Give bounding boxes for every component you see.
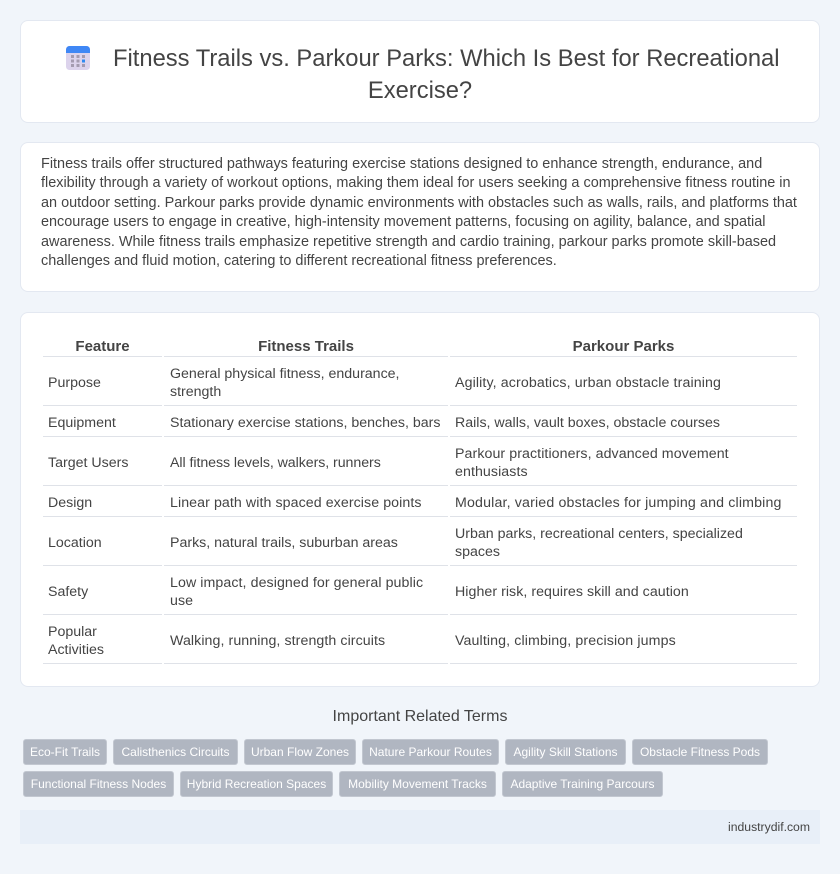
comparison table: spaces <box>455 544 500 560</box>
table headers: Parkour Parks <box>573 338 674 355</box>
related term tags: Hybrid Recreation Spaces <box>187 777 326 791</box>
icon: calendar <box>66 46 90 70</box>
related term tags: Calisthenics Circuits <box>121 745 230 759</box>
comparison table: Modular, varied obstacles for jumping and climbing <box>455 495 782 511</box>
comparison table: Target Users <box>48 455 128 471</box>
comparison table: Low impact, designed for general public <box>170 575 423 591</box>
related term tags: Obstacle Fitness Pods <box>640 745 760 759</box>
related term tags: Adaptive Training Parcours <box>510 777 655 791</box>
comparison table: Rails, walls, vault boxes, obstacle courses <box>455 415 720 431</box>
comparison table: Vaulting, climbing, precision jumps <box>455 633 676 649</box>
related term tags: Nature Parkour Routes <box>369 745 492 759</box>
title: Exercise? <box>368 77 472 104</box>
comparison table: Design <box>48 495 92 511</box>
related terms heading: Important Related Terms <box>333 708 507 725</box>
comparison table <box>43 338 797 664</box>
related term tags <box>23 739 768 797</box>
comparison table: All fitness levels, walkers, runners <box>170 455 381 471</box>
comparison table: Activities <box>48 642 104 658</box>
related term tags: Urban Flow Zones <box>251 745 349 759</box>
comparison table: Popular <box>48 624 97 640</box>
comparison table: strength <box>170 384 221 400</box>
related term tags: Functional Fitness Nodes <box>31 777 166 791</box>
comparison table: enthusiasts <box>455 464 528 480</box>
intro text: an outdoor setting. Parkour parks provide dynamic environments with obstacles such as walls, rails, and platforms that <box>41 194 797 210</box>
comparison table: Equipment <box>48 415 116 431</box>
intro text: challenges and fluid motion, catering to different recreational fitness preferences. <box>41 253 557 269</box>
comparison table: Safety <box>48 584 88 600</box>
comparison table: General physical fitness, endurance, <box>170 366 400 382</box>
panel: intro paragraph <box>20 142 820 292</box>
comparison table: Higher risk, requires skill and caution <box>455 584 689 600</box>
title <box>113 45 780 104</box>
header panel <box>20 20 820 123</box>
comparison table: Walking, running, strength circuits <box>170 633 385 649</box>
footer source: industrydif.com <box>728 820 810 834</box>
table headers: Feature <box>75 338 130 355</box>
intro text: encourage users to engage in creative, high-intensity movement patterns, focusing on agility, balance, and spatial <box>41 214 765 230</box>
intro text <box>41 156 797 269</box>
comparison table: use <box>170 593 193 609</box>
related term tags: Mobility Movement Tracks <box>348 777 487 791</box>
related term tags: Eco-Fit Trails <box>30 745 100 759</box>
comparison table: Stationary exercise stations, benches, bars <box>170 415 440 431</box>
intro text: awareness. While fitness trails emphasize repetitive strength and cardio training, parkour parks promote skill-based <box>41 234 776 250</box>
comparison table: Urban parks, recreational centers, specialized <box>455 526 743 542</box>
comparison table: Agility, acrobatics, urban obstacle training <box>455 375 721 391</box>
comparison table: Location <box>48 535 102 551</box>
table headers: Fitness Trails <box>258 338 354 355</box>
comparison table: Purpose <box>48 375 101 391</box>
title: Fitness Trails vs. Parkour Parks: Which Is Best for Recreational <box>113 45 780 72</box>
table headers <box>75 338 674 355</box>
intro text: Fitness trails offer structured pathways featuring exercise stations designed to enhance strength, endurance, and <box>41 156 762 172</box>
comparison table: Linear path with spaced exercise points <box>170 495 422 511</box>
comparison table: Parks, natural trails, suburban areas <box>170 535 398 551</box>
footer bar <box>20 810 820 844</box>
panel: comparison table <box>20 312 820 687</box>
related term tags: Agility Skill Stations <box>513 745 618 759</box>
intro text: flexibility through a variety of workout options, making them ideal for users seeking a comprehensive fitness routine in <box>41 175 791 191</box>
comparison table: Parkour practitioners, advanced movement <box>455 446 729 462</box>
